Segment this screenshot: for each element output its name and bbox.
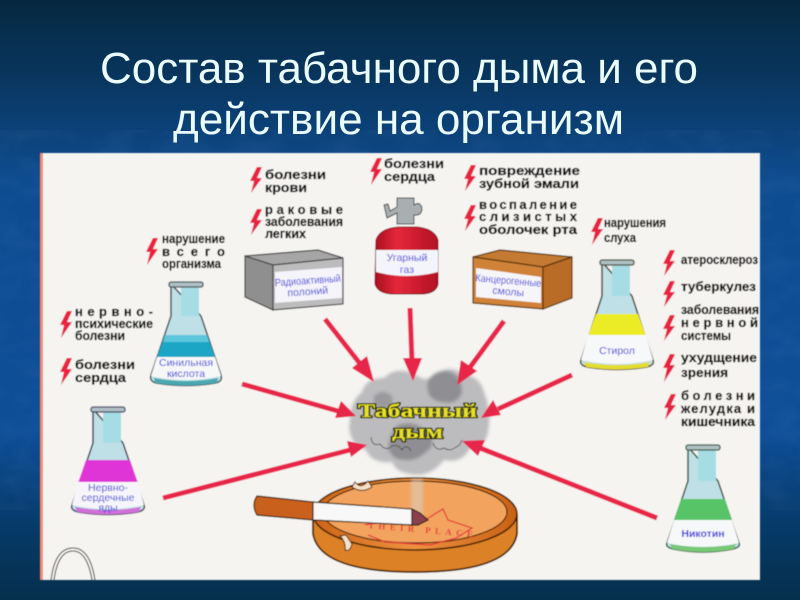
flask label: сердечные (82, 492, 135, 504)
box label (475, 272, 542, 299)
callout: heart diseases left (60, 357, 135, 385)
callout: atherosclerosis (663, 250, 758, 276)
callout: nervous system: заболевания (681, 302, 759, 317)
callout: tuberculosis (663, 279, 757, 307)
box: carcinogenic tars (473, 250, 572, 309)
flask label (82, 482, 135, 514)
ashtray (313, 478, 517, 572)
callout: lung cancer: заболевания (265, 214, 343, 229)
callout: lung cancer (250, 202, 343, 241)
callout: stomach and intestine (664, 388, 756, 429)
flask label: Нервно- (88, 482, 128, 494)
callout: nervous system: системы (681, 328, 731, 343)
flask label (159, 357, 213, 380)
callout: hearing: слуха (604, 230, 637, 245)
title (100, 44, 698, 144)
callout: oral mucosa (464, 197, 578, 237)
arrow: carbon monoxide to smoke (403, 308, 422, 381)
flask label: яды (98, 502, 118, 514)
smoke wisps (371, 437, 462, 451)
flask: hydrogen cyanide (151, 282, 221, 386)
callout: oral mucosa: воспаление (479, 197, 577, 212)
arrow: polonium to smoke (325, 319, 374, 382)
callout: vision: ухудщение (681, 350, 757, 365)
label: tobacco smoke: дым (392, 422, 443, 443)
callout: heart diseases left: сердца (75, 370, 127, 385)
arrow: hydrogen cyanide to smoke (242, 384, 356, 418)
flask label: Синильная (159, 357, 213, 369)
flask: nerve and cardiac poisons (72, 407, 144, 514)
callout: hearing (591, 215, 666, 245)
title: действие на организм (173, 95, 624, 144)
callout: vision (663, 350, 757, 382)
smoke stream (411, 478, 423, 520)
cylinder: carbon monoxide (375, 198, 438, 294)
flask label: Никотин (681, 528, 725, 540)
callout: heart diseases left: болезни (75, 357, 135, 372)
callout: whole body: нарушение (162, 231, 225, 246)
box label: смолы (492, 285, 525, 299)
callout: tooth enamel: зубной эмали (479, 176, 579, 191)
box label: Радиоактивный (274, 273, 341, 289)
callout: oral mucosa: оболочек рта (479, 222, 578, 237)
callout: nervous system (663, 302, 759, 343)
callout: tooth enamel: повреждение (479, 163, 580, 178)
flask label: Стирол (599, 345, 635, 357)
ashtray notches (340, 481, 372, 550)
partial flask at bottom (51, 548, 95, 580)
arrow: nicotine to smoke (462, 440, 657, 518)
arrow: nerve poisons to smoke (163, 441, 367, 498)
smoke cloud (349, 369, 489, 475)
callout: oral mucosa: слизистых (479, 209, 578, 224)
callout: neuropsychiatric diseases: нервно- (75, 304, 153, 319)
callout: atherosclerosis: атеросклероз (681, 252, 758, 267)
callout: blood diseases: крови (265, 180, 307, 195)
flask label: кислота (167, 368, 205, 380)
box label: полоний (287, 285, 329, 299)
ashtray logo: THEIR PLACE (368, 520, 473, 539)
callout: blood diseases (250, 167, 326, 195)
cylinder label (387, 252, 427, 276)
callout: whole body: всего (162, 244, 225, 259)
callout: vision: зрения (681, 365, 728, 380)
callout: heart diseases top (370, 156, 444, 185)
callout: blood diseases: болезни (265, 167, 326, 182)
cylinder label: газ (400, 264, 414, 276)
callout: stomach and intestine: желудка и (680, 401, 755, 416)
label: tobacco smoke: Табачный (358, 401, 477, 422)
callout: neuropsychiatric diseases: психические (75, 316, 153, 331)
arrow: tars to smoke (457, 321, 504, 385)
callout: lung cancer: легких (265, 226, 307, 241)
callout: nervous system: нервной (681, 315, 758, 330)
callout: heart diseases top: сердца (384, 169, 436, 184)
callout: neuropsychiatric diseases: болезни (75, 328, 125, 343)
cylinder label: Угарный (387, 252, 427, 264)
panel: diagram (40, 153, 760, 580)
flask: styrene (581, 260, 653, 370)
callout: whole body (146, 231, 225, 271)
box label: Канцерогенные (475, 272, 542, 290)
callout: tooth enamel (464, 163, 580, 191)
cigarette (254, 496, 428, 525)
flask: nicotine (667, 445, 739, 552)
box label (274, 273, 341, 299)
title: Состав табачного дыма и его (100, 44, 698, 93)
arrow: styrene to smoke (481, 375, 572, 418)
label: tobacco smoke (358, 401, 477, 443)
callout: stomach and intestine: болезни (681, 388, 755, 403)
callout: tuberculosis: туберкулез (681, 279, 757, 294)
ashtray logo (365, 509, 473, 545)
callout: stomach and intestine: кишечника (681, 414, 756, 429)
callout: neuropsychiatric diseases (60, 304, 153, 343)
callout: hearing: нарушения (604, 215, 666, 230)
callout: lung cancer: раковые (265, 202, 343, 217)
box: polonium (245, 250, 343, 310)
callout: whole body: организма (162, 256, 222, 271)
callout: heart diseases top: болезни (384, 156, 444, 171)
